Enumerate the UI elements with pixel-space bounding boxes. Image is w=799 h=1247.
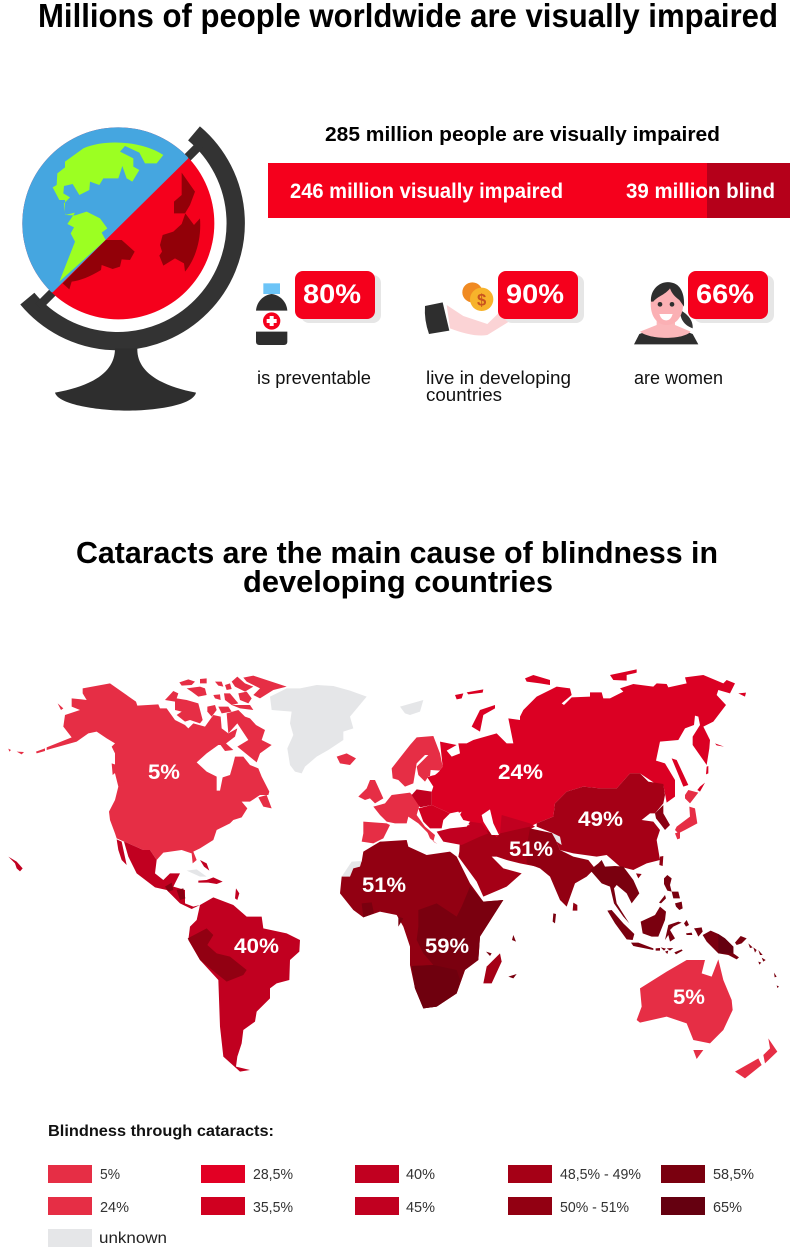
legend [48,1123,754,1247]
subtitle: 285 million people are visually impaired [325,124,720,146]
value: 90% [506,279,564,309]
region: Papua New Guinea [718,934,733,953]
region: Africa north and west [340,840,503,1008]
region: South Asia [527,828,595,907]
legend title: Blindness through cataracts: [48,1123,274,1140]
bar label: visually impaired: 246 million visually impaired [290,180,563,203]
label: countries [426,385,502,405]
stat: preventable [256,271,381,388]
region: Central America [8,838,239,909]
legend labels [99,1166,754,1247]
legend labels: 50% - 51% [560,1199,629,1216]
region: South America [188,897,300,1072]
badge: 66% [688,271,768,319]
legend swatches [48,1165,705,1247]
region: Western Sahara [342,861,362,877]
heading: cataracts: Cataracts are the main cause of blindness in [76,535,718,570]
icon: hand with coins [425,282,512,335]
legend labels: 40% [406,1166,435,1183]
badge: 90% [498,271,578,319]
region: Greenland [270,685,367,773]
region: Japan [675,790,698,839]
region: Central Asia [500,815,535,837]
region: Cuba [187,869,207,877]
map: Europe [358,736,488,845]
stacked bar [268,163,790,218]
world map [8,669,779,1078]
legend labels: 5% [100,1166,120,1183]
value: 80% [303,279,361,309]
region: North America [8,683,356,863]
region: small Indian Ocean islands [398,913,556,978]
badge shadow [694,275,774,323]
badge shadow [504,275,584,323]
label: are women [634,368,723,388]
map: Americas and Greenland [8,676,367,1072]
legend labels: 35,5% [253,1199,293,1216]
icon: hand with coins: $ [477,290,487,309]
region: Central America dark [165,883,185,900]
icon: medicine bottle [256,283,287,345]
region: Arctic Canada [165,676,287,762]
region: Ukraine and Balkans [418,805,450,828]
badge shadow [301,275,381,323]
region: Southern Africa [412,965,460,1008]
legend labels: unknown [99,1230,167,1247]
seas [430,770,499,835]
label: is preventable [257,368,371,388]
map value: Russia: 24% [498,761,543,784]
label: live in developing [426,368,571,388]
map value: South America: 40% [234,935,279,958]
region: Madagascar [483,953,502,983]
map value: North America: 5% [148,761,180,784]
map value: China: 49% [578,808,623,831]
region: Svalbard [400,700,423,715]
icon: globe [22,127,236,411]
map value: West Africa: 51% [362,874,406,897]
region: Russia [427,669,746,837]
region: West Africa patch [362,902,374,917]
map: Eastern hemisphere [340,669,777,1078]
legend labels: 58,5% [713,1166,754,1183]
region: Turkey and Caucasus [437,822,488,845]
map value: South Asia: 51% [509,838,553,861]
region: Middle East and Central Asia [458,827,537,897]
region: Kashmir [552,833,562,845]
map value: Australia: 5% [673,986,705,1009]
legend labels: 28,5% [253,1166,293,1183]
region: China [537,773,665,870]
value: 66% [696,279,754,309]
heading: cataracts: developing countries [243,564,553,599]
badge: 80% [295,271,375,319]
legend labels: 65% [713,1199,742,1216]
map value: Africa: 59% [425,935,469,958]
region: Peru and Bolivia [188,928,247,982]
region: Africa east and central [412,887,503,1008]
region: Australia and New Zealand [637,959,777,1078]
legend labels: 48,5% - 49% [560,1166,641,1183]
stat: developing countries [425,271,584,405]
icon: woman [634,282,698,344]
region: Sri Lanka and islands [573,856,663,911]
legend labels: 45% [406,1199,435,1216]
bar label: blind: 39 million blind [626,180,775,203]
region: Poland [412,789,432,807]
stat: women [634,271,774,388]
legend labels: 24% [100,1199,129,1216]
map: Southeast Asia [590,860,779,988]
region: Korea [655,805,670,830]
